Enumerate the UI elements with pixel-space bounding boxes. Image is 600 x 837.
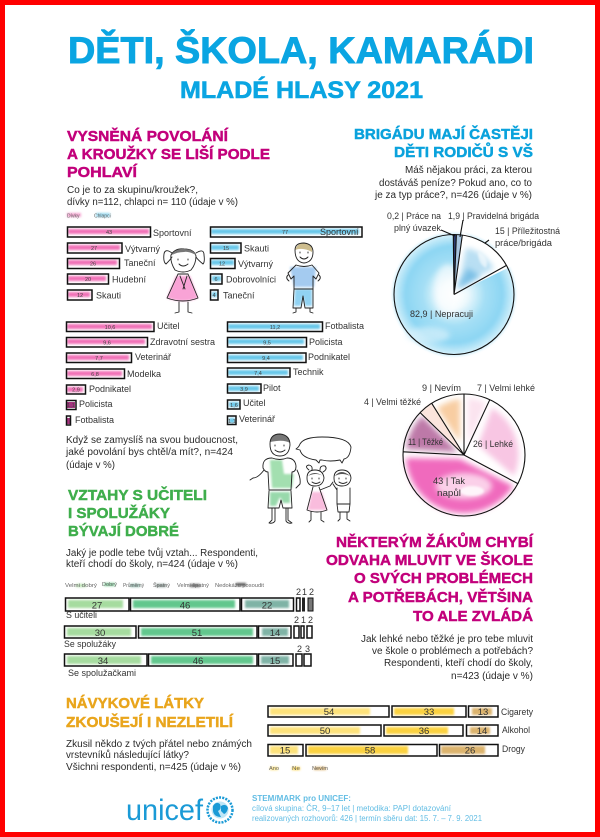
bar chart: girls occupations: Zdravotní sestra <box>150 337 215 347</box>
heading: relationships: BÝVAJÍ DOBRÉ <box>68 522 179 540</box>
source note: realizovaných rozhovorů: 426 | termín sběru dat: 15. 7. – 7. 9. 2021 <box>252 814 483 823</box>
legend: relationships: Velmi dobrý <box>65 583 98 589</box>
legend: relationships: Nedokážu posoudit <box>215 583 265 589</box>
question text: clubs <box>67 185 238 208</box>
bar chart: girls occupations: Modelka <box>127 369 161 379</box>
bar chart: boys occupations: Policista <box>309 337 343 347</box>
bar row: with teachers: 22 <box>262 600 272 612</box>
heading: relationships: I SPOLUŽÁKY <box>68 504 170 522</box>
bar row: cigarettes: 54 <box>324 707 334 718</box>
bar row: drugs: 58 <box>365 746 375 756</box>
heading: courage to speak at school: O SVÝCH PROBLÉMECH <box>354 569 533 587</box>
bar row: with female classmates: 2 <box>297 644 302 654</box>
legend: girls and boys: Chlapci <box>94 214 111 220</box>
heading: jobs <box>354 125 533 161</box>
bar row: with teachers <box>66 587 314 620</box>
bar chart: boys clubs: Skauti <box>244 244 269 254</box>
bar row: with teachers: 1 <box>302 587 307 597</box>
question text: occupations: (údaje v %) <box>66 460 115 471</box>
bar row: cigarettes <box>268 706 533 718</box>
bar row: drugs: 26 <box>465 746 475 756</box>
legend: substances: Ne <box>292 766 300 772</box>
bar chart: boys occupations: 3,9 <box>240 387 248 393</box>
bar chart: boys clubs: Sportovní <box>320 227 359 237</box>
subtitle: MLADÉ HLASY 2021 <box>180 76 423 104</box>
pie chart: talking about problems: 7 | Velmi lehké <box>477 383 535 393</box>
bar chart: boys clubs <box>210 227 362 300</box>
question text: occupations: jaké povolání bys chtěl/a mít?, n=424 <box>65 447 233 458</box>
heading: courage to speak at school <box>326 532 534 625</box>
bar chart: girls clubs: 43 <box>106 230 112 236</box>
bar chart: girls occupations: 6,8 <box>91 372 99 378</box>
bar chart: girls occupations: 10,6 <box>105 325 115 331</box>
heading: courage to speak at school: ODVAHA MLUVIT VE ŠKOLE <box>326 551 533 569</box>
source note: STEM/MARK pro UNICEF: <box>252 794 351 803</box>
bar row: with female classmates: 34 <box>98 656 108 667</box>
bar chart: girls clubs: 12 <box>77 293 83 299</box>
bar chart: boys clubs: 6 <box>214 277 218 283</box>
question text: jobs: Máš nějakou práci, za kterou <box>405 165 532 176</box>
bar row: cigarettes: 13 <box>478 707 488 718</box>
bar chart: girls occupations <box>66 321 215 425</box>
bar row: drugs: 15 <box>280 746 290 756</box>
heading: relationships <box>68 486 207 540</box>
source note: cílová skupina: ČR, 9–17 let | metodika: PAPI dotazování <box>252 804 452 813</box>
question text: occupations: Když se zamyslíš na svou budoucnost, <box>66 435 238 446</box>
bar row: drugs: Drogy <box>502 744 525 754</box>
panel: relationships <box>64 486 314 678</box>
bar chart: boys occupations: Fotbalista <box>325 321 364 331</box>
bar row: with male classmates: 14 <box>270 628 280 639</box>
heading: courage to speak at school: NĚKTERÝM ŽÁKŮM CHYBÍ <box>336 532 534 551</box>
bar chart: boys clubs: 4 <box>212 293 216 299</box>
icon: family drawing with speech bubble <box>250 434 351 523</box>
pie chart: jobs: práce/brigáda <box>495 238 552 248</box>
pie chart: talking about problems: napůl <box>437 488 461 498</box>
question text: clubs: dívky n=112, chlapci n= 110 (údaje v %) <box>67 197 238 208</box>
bar chart: girls clubs: 27 <box>91 246 97 252</box>
question text: substances <box>66 739 252 773</box>
bar row: with female classmates <box>64 644 311 678</box>
bar chart: girls clubs: Výtvarný <box>125 244 161 254</box>
legend: girls and boys: Dívky <box>67 214 80 220</box>
bar row: alcohol: 14 <box>477 726 487 737</box>
pie chart: talking about problems: 9 | Nevím <box>422 383 461 393</box>
bar chart: girls occupations: 2,9 <box>72 388 80 394</box>
source note <box>252 794 483 823</box>
title: DĚTI, ŠKOLA, KAMARÁDI <box>68 29 534 71</box>
question text: occupations <box>65 435 238 471</box>
bar row: with teachers: 2 <box>296 587 301 597</box>
question text: jobs: dostáváš peníze? Pokud ano, co to <box>379 178 532 189</box>
bar chart: girls occupations: Podnikatel <box>89 384 131 394</box>
bar chart: boys clubs: 12 <box>219 262 225 268</box>
pie chart: jobs: plný úvazek <box>394 223 441 233</box>
bar chart: boys clubs: 15 <box>223 246 229 252</box>
question text: relationships: Jaký je podle tebe tvůj vztah... Respondenti, <box>66 547 258 559</box>
bar row: cigarettes: 33 <box>424 707 434 718</box>
question text: jobs <box>374 165 532 201</box>
question text: jobs: je za typ práce?, n=426 (údaje v %) <box>374 190 532 201</box>
bar row: with female classmates: 46 <box>193 656 203 667</box>
question text: substances: Všichni respondenti, n=425 (údaje v %) <box>66 762 241 773</box>
legend: substances: Ano <box>269 766 279 772</box>
heading: courage to speak at school: A POTŘEBÁCH, VĚTŠINA <box>348 588 533 606</box>
question text: courage: ve škole o problémech a potřebách? <box>372 646 533 657</box>
question text: courage <box>361 634 533 682</box>
bar chart: girls clubs: 26 <box>90 262 96 268</box>
legend: substances <box>269 766 328 772</box>
bar chart: girls clubs <box>68 227 192 300</box>
bar chart: girls occupations: Učitel <box>157 321 180 331</box>
bar chart: girls clubs: Hudební <box>112 274 147 284</box>
pie chart: talking about problems <box>364 383 535 516</box>
legend: girls and boys <box>67 213 111 220</box>
bar chart: boys clubs: Dobrovolníci <box>226 274 276 284</box>
pie chart: jobs: 15 | Příležitostná <box>495 226 560 236</box>
heading: jobs: BRIGÁDU MAJÍ ČASTĚJI <box>354 125 533 143</box>
icon: girl drawing <box>164 249 204 313</box>
bar row: with teachers: 2 <box>309 587 314 597</box>
bar row: with male classmates: 2 <box>294 615 299 625</box>
heading: relationships: VZTAHY S UČITELI <box>68 486 207 504</box>
bar row: with male classmates: 2 <box>308 615 313 625</box>
question text: clubs: Co je to za skupinu/kroužek?, <box>67 185 198 196</box>
heading: substances: ZKOUŠEJÍ I NEZLETILÍ <box>66 713 234 731</box>
question text: relationships: kteří chodí do školy, n=424 (údaje v %) <box>66 559 238 570</box>
bar row: alcohol: 50 <box>320 726 330 737</box>
legend: relationships: Průměrný <box>123 582 144 589</box>
bar chart: girls occupations: Veterinář <box>135 352 172 362</box>
question text: substances: vrstevníků následující látky? <box>66 749 189 761</box>
pie chart: jobs <box>387 211 560 356</box>
question text: relationships <box>66 547 258 570</box>
heading: jobs: DĚTI RODIČŮ S VŠ <box>394 142 533 161</box>
bar row: with female classmates: 15 <box>270 656 280 667</box>
bar chart: girls occupations: Fotbalista <box>75 415 114 425</box>
bar chart: girls clubs: Taneční <box>124 258 156 268</box>
bar row: with teachers: 27 <box>92 600 102 612</box>
legend: substances: Nevím <box>312 766 328 772</box>
bar chart: boys occupations: Veterinář <box>239 414 276 424</box>
bar chart: boys occupations: 9,5 <box>263 340 271 346</box>
pie chart: talking about problems: 11 | Těžké <box>408 437 443 447</box>
bar chart: boys clubs: Taneční <box>223 290 255 300</box>
legend: relationships: Dobrý <box>102 582 118 588</box>
question text: courage: n=423 (údaje v %) <box>451 671 533 682</box>
bar row: alcohol: 36 <box>419 726 429 737</box>
heading: dream jobs: POHLAVÍ <box>67 164 138 181</box>
bar chart: girls clubs: 20 <box>85 277 91 283</box>
pie chart: jobs: 1,9 | Pravidelná brigáda <box>448 211 539 221</box>
heading: dream jobs: VYSNĚNÁ POVOLÁNÍ <box>67 127 229 145</box>
bar chart: girls clubs: Skauti <box>96 290 121 300</box>
question text: substances: Zkusil někdo z tvých přátel nebo známých <box>66 739 252 750</box>
bar chart: boys occupations: Technik <box>293 367 324 377</box>
panel: dream jobs and clubs <box>65 127 364 471</box>
bar chart: boys occupations <box>228 321 364 425</box>
pie chart: talking about problems: 26 | Lehké <box>473 439 513 449</box>
bar row: with teachers: 46 <box>180 600 190 612</box>
bar row: cigarettes: Cigarety <box>501 707 533 717</box>
bar row: with female classmates: Se spolužačkami <box>68 668 136 678</box>
question text: courage: Respondenti, kteří chodí do školy, <box>384 658 533 669</box>
pie chart: talking about problems: 43 | Tak <box>433 476 466 486</box>
bar chart: boys occupations: 11,2 <box>270 325 280 331</box>
bar chart: boys occupations: Podnikatel <box>308 352 350 362</box>
pie chart: jobs: 0,2 | Práce na <box>387 211 441 221</box>
panel: part-time jobs <box>354 125 560 356</box>
heading: dream jobs: A KROUŽKY SE LIŠÍ PODLE <box>67 145 270 163</box>
panel: addictive substances <box>66 695 533 773</box>
bar row: with male classmates <box>64 615 313 649</box>
bar chart: boys occupations: 1,6 <box>230 403 238 409</box>
bar row: with male classmates: 51 <box>192 628 202 639</box>
bar chart: boys clubs: 77 <box>282 230 288 236</box>
bar row: with teachers: S učiteli <box>66 610 97 620</box>
bar chart: girls occupations: 9,6 <box>103 340 111 346</box>
bar chart: girls occupations: Policista <box>79 399 113 409</box>
bar chart: boys occupations: Pilot <box>263 383 281 393</box>
bar chart: boys occupations: 7,4 <box>254 371 262 377</box>
bar row: drugs <box>268 744 525 756</box>
icon: unicef globe <box>208 798 232 822</box>
bar chart: girls occupations: 1,1 <box>67 403 75 409</box>
legend: relationships <box>65 582 265 589</box>
heading: substances: NÁVYKOVÉ LÁTKY <box>66 695 204 712</box>
bar row: alcohol: Alkohol <box>502 725 530 735</box>
bar row: with male classmates: 1 <box>301 615 306 625</box>
bar row: alcohol <box>268 725 530 737</box>
heading: dream jobs <box>67 127 270 181</box>
heading: courage to speak at school: TO ALE ZVLÁDÁ <box>413 608 533 625</box>
legend: relationships: Špatný <box>153 582 171 589</box>
bar row: with female classmates: 3 <box>305 644 310 654</box>
bar chart: boys occupations: 9,4 <box>262 356 270 362</box>
bar chart: girls clubs: Sportovní <box>153 228 192 238</box>
bar chart: boys occupations: Učitel <box>243 398 266 408</box>
bar row: with male classmates: 30 <box>95 628 105 639</box>
heading: substances <box>66 695 234 731</box>
question text: courage: Jak lehké nebo těžké je pro tebe mluvit <box>361 634 533 645</box>
logo: unicef: unicef <box>126 794 204 827</box>
bar chart: girls occupations: 7,7 <box>95 356 103 362</box>
bar chart: boys clubs: Výtvarný <box>238 259 274 269</box>
icon: boy drawing <box>287 243 320 313</box>
bar chart: boys occupations: 1,1 <box>228 419 236 425</box>
legend: relationships: Velmi špatný <box>177 583 210 589</box>
pie chart: talking about problems: 4 | Velmi těžké <box>364 397 421 407</box>
pie chart: jobs: 82,9 | Nepracuji <box>410 309 473 319</box>
bar row: with male classmates: Se spolužáky <box>64 639 116 649</box>
